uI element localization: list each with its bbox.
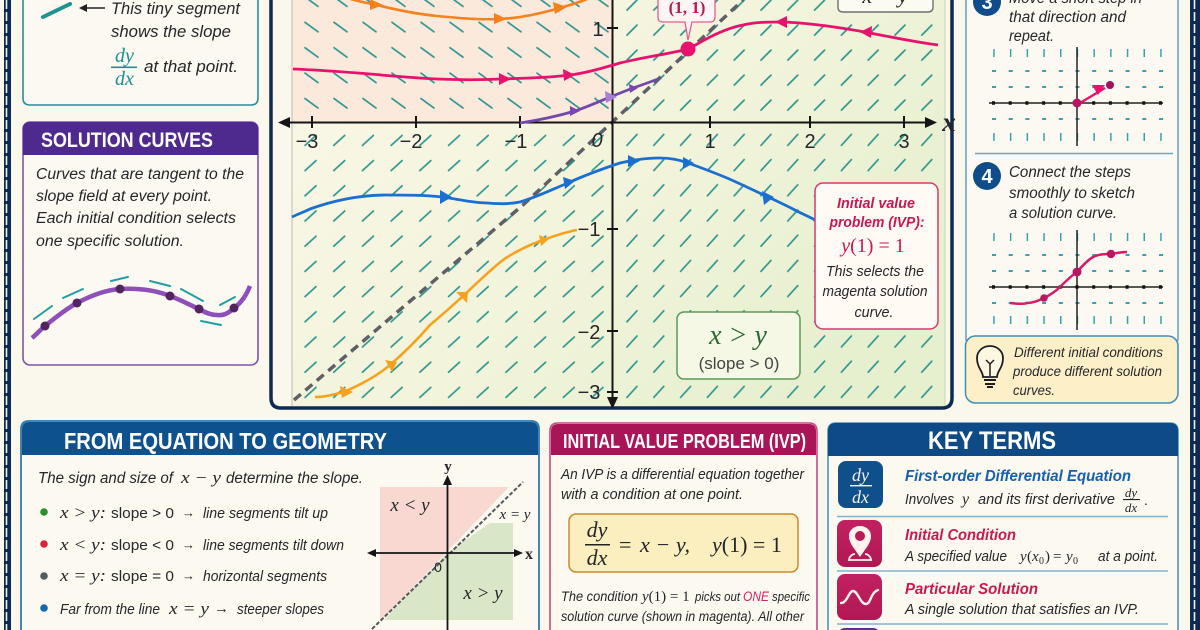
chart: curve with tangent segments xyxy=(32,277,250,338)
list: slope rules xyxy=(40,503,344,618)
chart: x-y regions diagram: x > y xyxy=(462,583,503,604)
term: first-order differential equation: dy xyxy=(1125,485,1137,500)
list: slope rules: slope = 0 xyxy=(111,568,174,585)
text: IVP explanation: specific xyxy=(772,589,810,604)
term: first-order differential equation xyxy=(838,461,1148,515)
slope field segments xyxy=(294,0,941,403)
term: first-order differential equation: Involves xyxy=(905,492,954,508)
text: segment description: shows the slope xyxy=(111,23,231,41)
step 4: 4 xyxy=(981,166,993,188)
icon: dy/dx xyxy=(838,461,883,508)
axis labels xyxy=(296,19,956,404)
panel: slope segment explanation xyxy=(23,0,258,105)
term: first-order differential equation: and its first derivative xyxy=(978,492,1115,508)
equation box: dx xyxy=(587,545,608,570)
term: particular solution xyxy=(837,574,1139,620)
curve: blue xyxy=(292,155,815,220)
text: callout body: curves. xyxy=(1013,382,1055,398)
list: slope rules: x = y xyxy=(168,599,210,618)
term: initial condition: x xyxy=(1031,549,1039,565)
text: callout body: Different initial conditions xyxy=(1014,344,1163,360)
step 4: smoothly to sketch xyxy=(1009,185,1135,202)
chart: x-y regions diagram: x xyxy=(525,546,533,563)
list: slope rules: x < y: xyxy=(59,535,106,554)
icon: purple term icon (cropped) xyxy=(838,628,880,630)
callout: initial value problem: problem (IVP): xyxy=(829,215,925,231)
callout: point (1,1) xyxy=(658,0,715,40)
text: IVP explanation: solution curve (shown in magenta). All other xyxy=(561,609,804,624)
text: callout body: produce different solution xyxy=(1012,363,1162,379)
term: initial condition: = xyxy=(1053,549,1061,565)
axis labels: −3 xyxy=(296,131,318,153)
callout: initial value problem: curve. xyxy=(854,305,894,321)
list: slope rules: → xyxy=(182,537,195,552)
term: initial condition: A specified value xyxy=(904,549,1007,565)
text: segment description: dy xyxy=(115,45,134,67)
heading: from equation to geometry xyxy=(22,422,538,455)
callout: different initial conditions xyxy=(966,336,1178,403)
equation box: dy xyxy=(587,517,608,542)
heading: initial value problem xyxy=(551,424,816,455)
chart: x-y regions diagram: x < y xyxy=(389,495,430,516)
callout: x = y label box xyxy=(838,0,933,12)
heading: key terms xyxy=(828,423,1178,456)
axis labels: 1 xyxy=(704,131,716,153)
panel: steps xyxy=(966,0,1178,340)
axis labels: −3 xyxy=(578,382,600,404)
term: initial condition: at a point. xyxy=(1098,549,1158,565)
text: IVP definition xyxy=(560,467,805,503)
callout: initial value problem: This selects the xyxy=(826,264,924,280)
text: segment description: This tiny segment xyxy=(111,0,241,18)
term: first-order differential equation: y xyxy=(960,491,970,508)
list: slope rules: Far from the line xyxy=(60,602,160,618)
term: first-order differential equation: . xyxy=(1144,492,1148,508)
callout: x > y slope positive: x > y xyxy=(708,320,767,351)
icon: light bulb xyxy=(977,346,1003,387)
text: IVP explanation: The condition xyxy=(561,589,638,604)
heading: key terms: KEY TERMS xyxy=(928,427,1056,455)
curve: magenta particular solution xyxy=(293,16,938,85)
callout: x > y slope positive: (slope > 0) xyxy=(699,354,779,373)
text: segment description: at that point. xyxy=(144,58,238,76)
axes xyxy=(278,0,937,409)
term: initial condition: ( xyxy=(1027,549,1032,565)
text: IVP explanation: ONE xyxy=(743,589,770,604)
text: IVP explanation: picks out xyxy=(694,590,740,604)
panel: initial value problem xyxy=(550,423,817,630)
axis labels: −1 xyxy=(578,219,600,241)
text: sign and size xyxy=(38,468,363,487)
text: solution curve description: one specific solution. xyxy=(36,233,184,250)
term: first-order differential equation: First-order Differential Equation xyxy=(905,468,1131,485)
heading: solution curves: SOLUTION CURVES xyxy=(41,129,213,152)
text: IVP explanation xyxy=(561,589,810,630)
icon: teal slope segment xyxy=(43,4,70,17)
chart: x-y regions diagram: x = y xyxy=(499,507,531,523)
icon: dy/dx: dx xyxy=(852,487,869,507)
equation box: x − y, xyxy=(639,532,690,557)
term: particular solution: Particular Solution xyxy=(905,581,1038,598)
callout: x > y slope positive xyxy=(677,312,800,379)
heading: solution curves xyxy=(23,122,258,155)
curve: purple xyxy=(520,79,658,123)
text: sign and size: The sign and size of xyxy=(38,470,175,487)
text: solution curve description xyxy=(36,166,244,250)
text: solution curve description: slope field at every point. xyxy=(36,188,212,205)
axis labels: −2 xyxy=(400,131,422,153)
term: initial condition xyxy=(837,520,1158,567)
callout: initial value problem: y(1) = 1 xyxy=(839,235,905,257)
panel: key terms xyxy=(828,423,1178,630)
step 3 xyxy=(973,0,1142,45)
step 3: that direction and xyxy=(1009,9,1127,26)
text: IVP definition: with a condition at one point. xyxy=(561,487,743,503)
step 4 xyxy=(973,162,1135,222)
heading: initial value problem: INITIAL VALUE PROBLEM (IVP) xyxy=(563,431,806,453)
chart: x-y regions diagram xyxy=(367,459,533,630)
line: x = y dashed xyxy=(294,0,743,400)
text: solution curve description: Curves that are tangent to the xyxy=(36,166,244,183)
text: sign and size: x − y xyxy=(180,468,222,487)
text: sign and size: determine the slope. xyxy=(226,470,363,487)
step 4: Connect the steps xyxy=(1009,164,1131,181)
axis labels: −1 xyxy=(505,131,527,153)
callout: initial value problem: magenta solution xyxy=(822,284,928,300)
chart: step 3 slope grid xyxy=(989,47,1164,146)
list: slope rules: → xyxy=(182,568,195,583)
list: slope rules: horizontal segments xyxy=(203,569,327,585)
chart: step 4 slope grid with curve xyxy=(989,230,1164,330)
curve: yellow-orange lower xyxy=(315,230,577,398)
axis labels: 1 xyxy=(592,19,604,41)
axis labels: 2 xyxy=(804,131,816,153)
chart background regions xyxy=(292,0,945,406)
axis labels: 3 xyxy=(898,131,910,153)
list: slope rules: → xyxy=(182,505,195,520)
list: slope rules: → xyxy=(214,600,229,617)
text: segment description: dx xyxy=(115,68,134,90)
icon: wave xyxy=(837,574,882,620)
callout: initial value problem xyxy=(815,183,938,329)
panel: solution curves xyxy=(23,122,258,365)
list: slope rules: x = y: xyxy=(59,566,106,585)
text: IVP definition: An IVP is a differential equation together xyxy=(560,467,805,483)
list: slope rules: x > y: xyxy=(59,503,106,522)
panel: main slope field chart xyxy=(271,0,956,409)
axis labels: −2 xyxy=(578,322,600,344)
list: slope rules: line segments tilt down xyxy=(203,538,344,554)
panel: from equation to geometry xyxy=(21,421,539,630)
term: initial condition: 0 xyxy=(1073,556,1078,567)
arrow: points to segment xyxy=(79,4,105,12)
term: initial condition: Initial Condition xyxy=(905,527,1016,544)
term: initial condition: y xyxy=(1018,549,1027,565)
chart: x-y regions diagram: 0 xyxy=(434,559,442,575)
term: initial condition: ) xyxy=(1045,549,1050,565)
text: callout body xyxy=(1012,344,1163,398)
callout: initial value problem: Initial value xyxy=(837,196,915,212)
icon: map pin xyxy=(837,520,882,567)
equation box: y(1) = 1 xyxy=(710,532,782,557)
chart: x-y regions diagram: y xyxy=(444,459,452,475)
term: initial condition: 0 xyxy=(1039,556,1044,567)
axis labels: 0 xyxy=(591,130,603,152)
term: particular solution: A single solution that satisfies an IVP. xyxy=(904,602,1139,618)
list: slope rules: line segments tilt up xyxy=(203,506,328,522)
term: first-order differential equation: dx xyxy=(1125,500,1137,515)
list: slope rules: slope < 0 xyxy=(111,537,174,554)
list: slope rules: slope > 0 xyxy=(111,505,174,522)
curve: orange upper xyxy=(345,0,587,24)
text: solution curve description: Each initial condition selects xyxy=(36,210,236,227)
step 4: a solution curve. xyxy=(1009,205,1117,222)
equation box: = xyxy=(619,532,631,557)
text: IVP explanation: y(1) = 1 xyxy=(640,589,690,605)
text: segment description xyxy=(111,0,241,90)
axis labels: x xyxy=(941,107,956,137)
list: slope rules: steeper slopes xyxy=(237,602,324,618)
equation box xyxy=(569,514,798,572)
step 3: repeat. xyxy=(1009,28,1054,45)
term: initial condition: y xyxy=(1064,549,1073,565)
icon: dy/dx: dy xyxy=(852,465,869,485)
heading: from equation to geometry: FROM EQUATION TO GEOMETRY xyxy=(64,428,387,454)
